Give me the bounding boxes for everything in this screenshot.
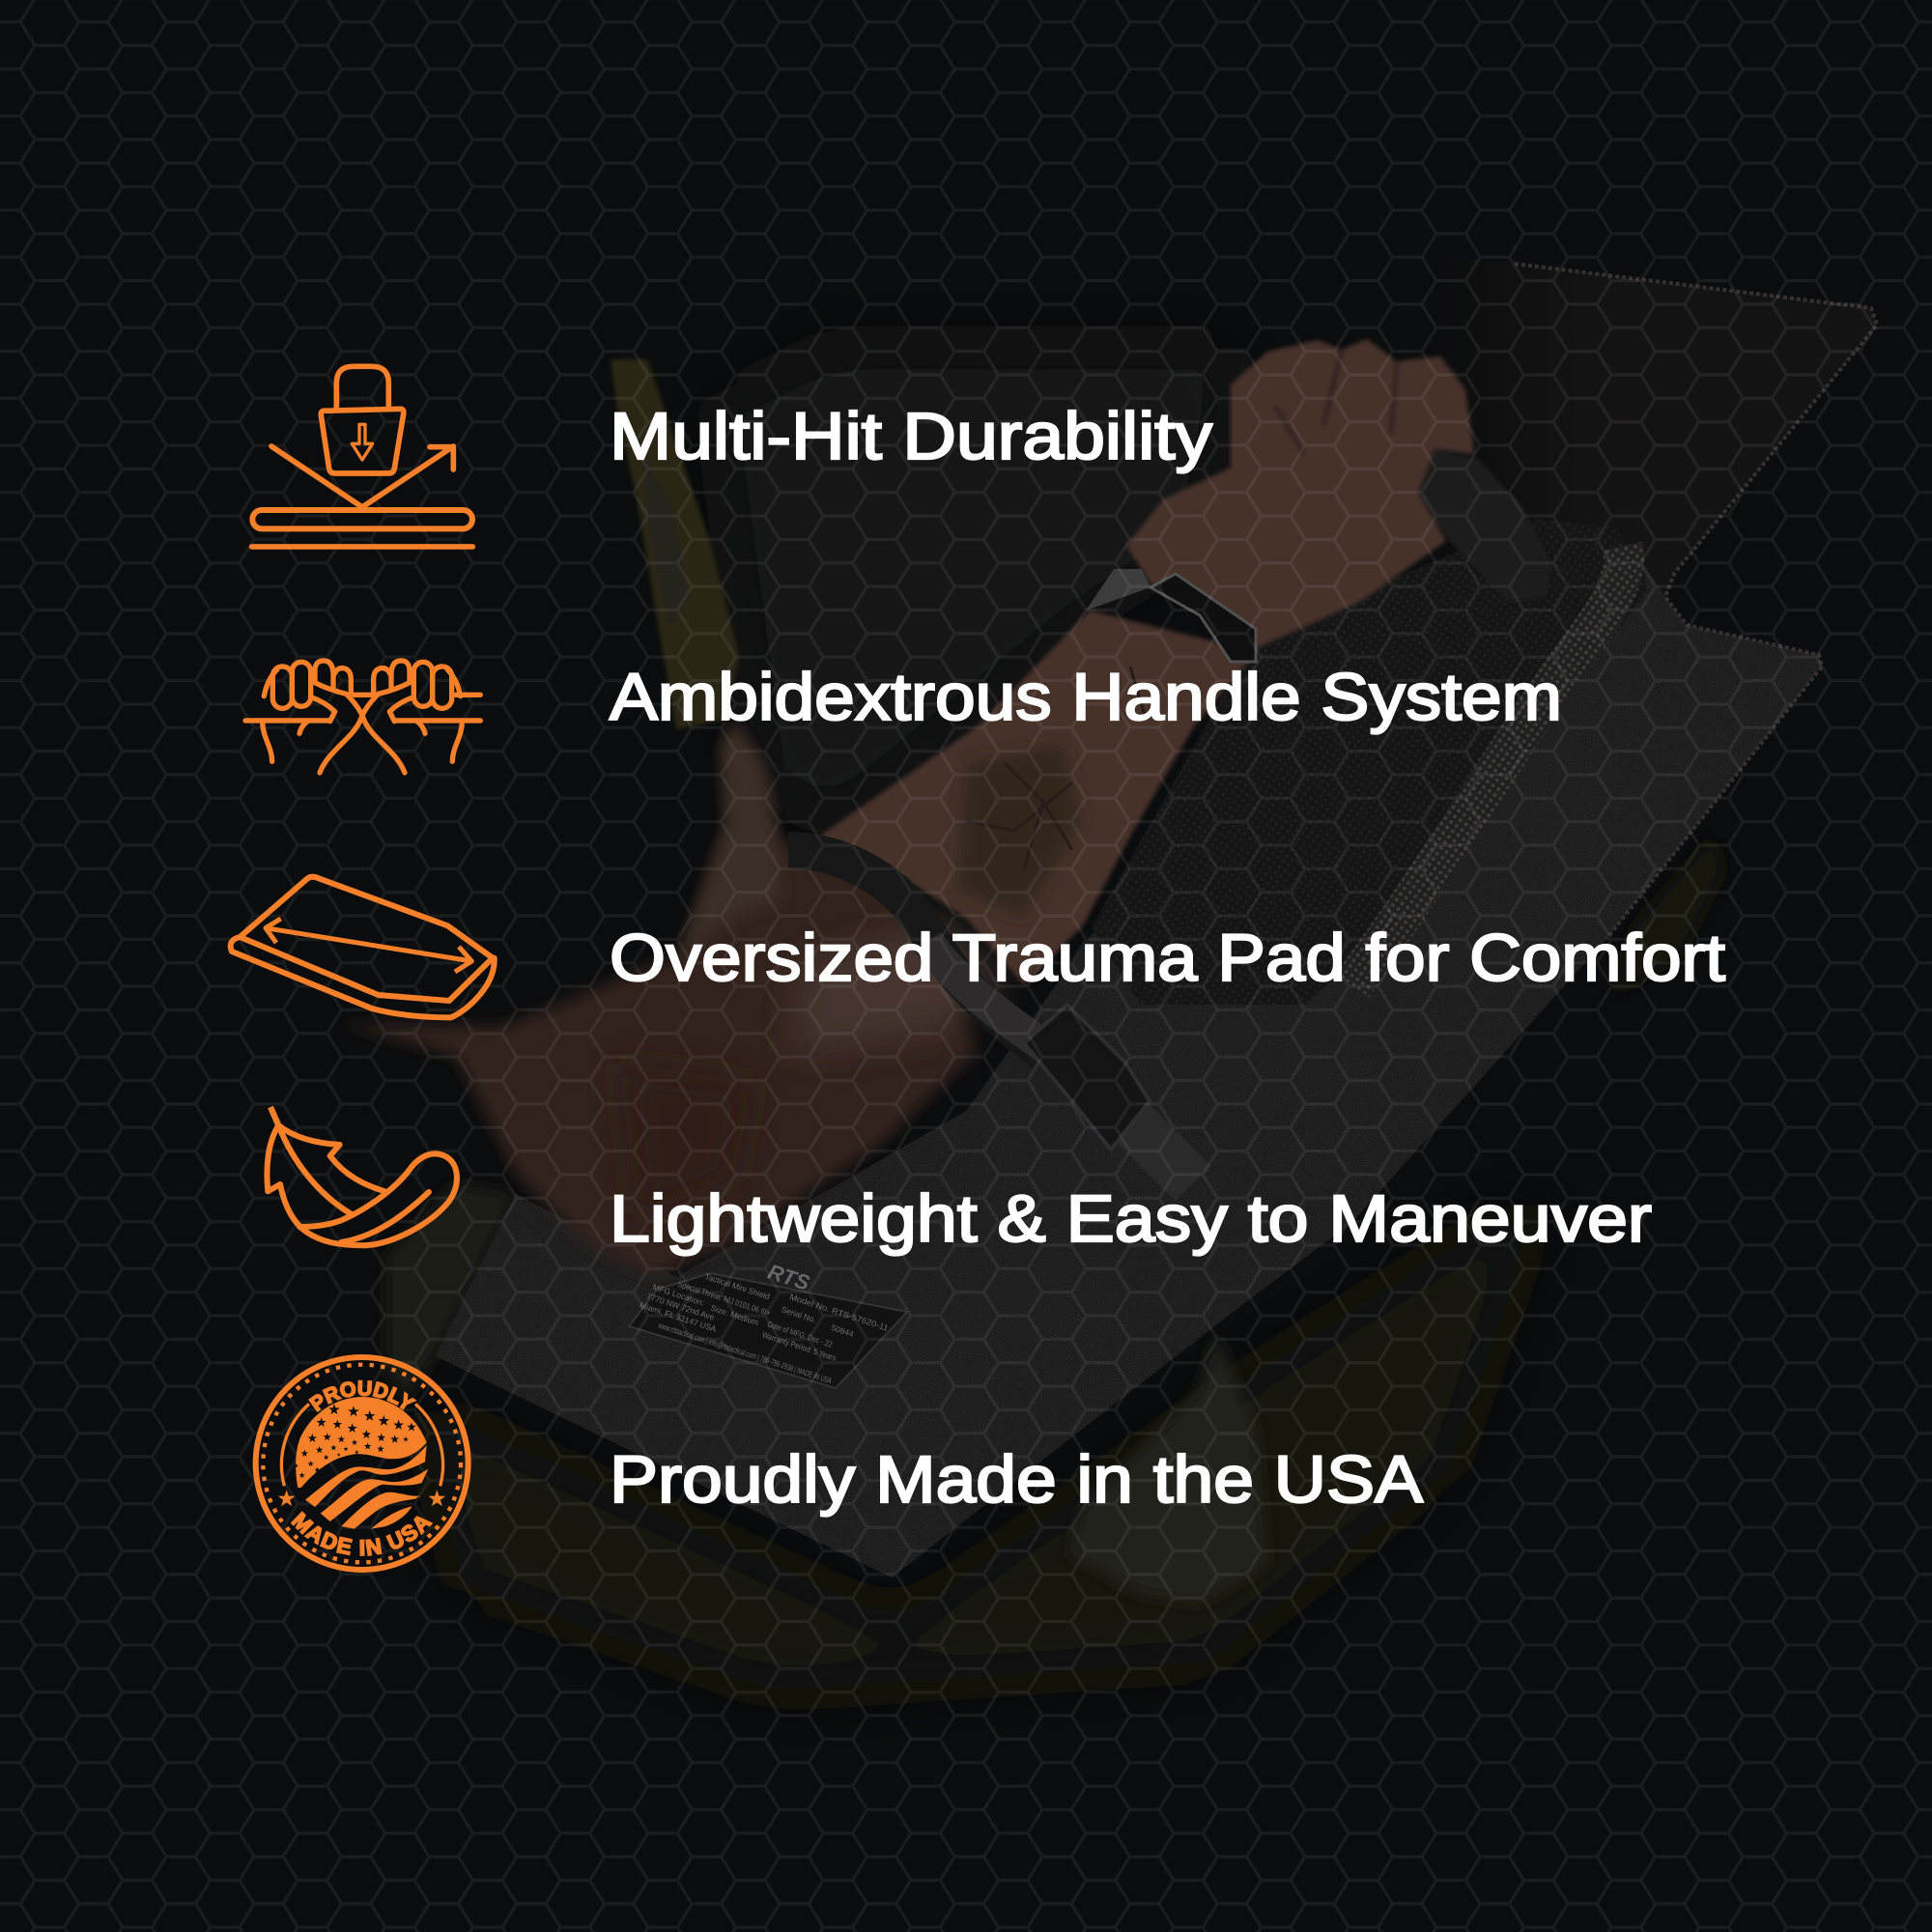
plate text: RTS xyxy=(765,1260,813,1295)
feather inner line xyxy=(341,1192,429,1242)
flag star field xyxy=(296,1397,427,1488)
plate text: Special Threat: NIJ 0101.06 III+ xyxy=(677,1279,772,1318)
feather spine xyxy=(278,1125,351,1214)
arm highlight xyxy=(792,918,1005,1053)
icon: two fists on handle xyxy=(245,661,480,773)
photo: operator gripping ballistic shield xyxy=(338,253,1877,1690)
badge text top: PROUDLY xyxy=(308,1379,417,1412)
trauma pad ridge xyxy=(1352,546,1624,985)
handle bar xyxy=(355,687,372,702)
feature label: Proudly Made in the USA: Proudly Made in the USA xyxy=(610,1442,1423,1517)
outer ring xyxy=(256,1357,469,1570)
shield grain xyxy=(425,512,1835,1584)
dotted ring xyxy=(263,1365,461,1562)
size arrow xyxy=(266,919,471,972)
plate line xyxy=(252,538,472,554)
olive pouch xyxy=(1070,1333,1267,1604)
strap webbing xyxy=(927,942,1053,1053)
flag stars xyxy=(294,1404,416,1478)
plate text: MFG Location: xyxy=(651,1282,706,1308)
shirt xyxy=(715,348,1236,831)
pad edge xyxy=(231,937,495,1017)
badge side stars xyxy=(278,1490,445,1506)
trauma pad xyxy=(1092,519,1647,1005)
icon: lock bouncing off plate xyxy=(252,366,472,547)
feature label: Oversized Trauma Pad for Comfort: Oversized Trauma Pad for Comfort xyxy=(610,921,1725,995)
flag stripes xyxy=(305,1445,428,1529)
inner ring arcs xyxy=(281,1404,443,1486)
shield handle xyxy=(1415,449,1551,602)
icon: proudly made in USA badge xyxy=(253,1354,471,1573)
forearm xyxy=(816,611,1256,985)
olive gear at bottom xyxy=(415,1188,1546,1690)
plate xyxy=(252,510,472,528)
plate text: 50844 xyxy=(830,1322,855,1339)
serial plate xyxy=(629,1225,907,1397)
olive strap left xyxy=(386,1183,516,1401)
icon: oversized trauma pad xyxy=(231,877,495,1017)
watch xyxy=(1086,569,1256,662)
lower strap xyxy=(1111,1101,1193,1183)
buckle xyxy=(1024,1005,1150,1150)
sleeve patch xyxy=(611,359,739,729)
shield back plate xyxy=(1401,253,1877,676)
plate text: Date of MFG: Dec - 22 xyxy=(766,1320,834,1350)
shield edge stitching xyxy=(1515,264,1877,939)
plate text: 7770 NW 72nd Ave xyxy=(645,1291,716,1322)
plate text xyxy=(635,1225,897,1397)
feature label: Lightweight & Easy to Maneuver: Lightweight & Easy to Maneuver xyxy=(610,1181,1652,1256)
tattoo lines xyxy=(966,667,1145,869)
knuckle lines xyxy=(1275,350,1397,454)
plate text: Size: Medium xyxy=(710,1303,760,1327)
strap xyxy=(788,850,1043,1053)
olive gear at right xyxy=(1613,838,1724,995)
deflection arrow xyxy=(271,446,453,507)
quill xyxy=(270,1107,278,1125)
plate text: Serial No. xyxy=(781,1304,817,1324)
tattoo shading xyxy=(956,744,1082,918)
feather outline xyxy=(267,1125,457,1245)
left fist xyxy=(245,661,405,773)
right fist xyxy=(320,661,480,773)
plate text: Miami, FL 33147 USA xyxy=(639,1300,718,1334)
icon: feather xyxy=(267,1107,457,1245)
badge text bottom: MADE IN USA xyxy=(290,1511,433,1556)
lock xyxy=(321,366,404,473)
shield front plate xyxy=(436,519,1822,1577)
hand xyxy=(1126,339,1474,648)
arm dark patch xyxy=(618,1063,753,1217)
plate text: Model No. RTS-57620-11 xyxy=(788,1292,890,1333)
plate text: Warranty Period: 5 Years xyxy=(761,1329,838,1363)
pad top xyxy=(240,877,493,1001)
upper arm xyxy=(676,723,782,966)
other arm xyxy=(338,723,979,1277)
plate text: Tactical Mini Shield xyxy=(703,1271,771,1301)
feather upper edge xyxy=(278,1125,384,1191)
plate text: www.rtstactical.com | info@rtstactical.com | 786-786-2938 | MADE IN USA xyxy=(657,1321,834,1385)
feature label: Ambidextrous Handle System: Ambidextrous Handle System xyxy=(610,660,1562,734)
feature label: Multi-Hit Durability: Multi-Hit Durability xyxy=(610,399,1213,473)
